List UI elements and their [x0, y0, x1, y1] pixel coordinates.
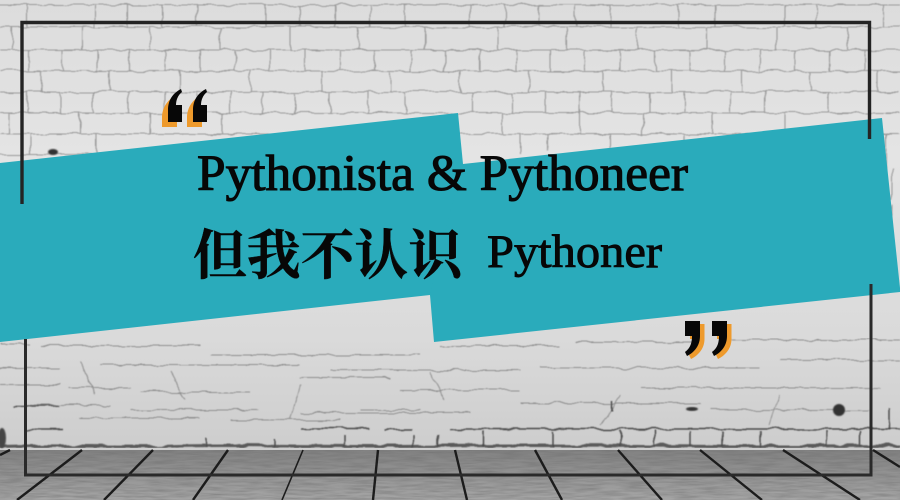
- wooden floor: [0, 450, 900, 500]
- heading line two: chinese: 但我不认识: [193, 226, 467, 286]
- icon: opening quote marks: [162, 89, 207, 127]
- decorative frame bottom: [26, 284, 871, 475]
- heading line two: latin: Pythoner: [487, 226, 662, 278]
- icon: closing quote marks: [685, 321, 732, 359]
- teal banner left: [0, 113, 463, 342]
- heading line one: Pythonista & Pythoneer: [197, 146, 688, 202]
- teal banner right: [430, 118, 900, 342]
- lower weathered wall cracks: [0, 340, 900, 425]
- decorative frame top: [22, 22, 870, 204]
